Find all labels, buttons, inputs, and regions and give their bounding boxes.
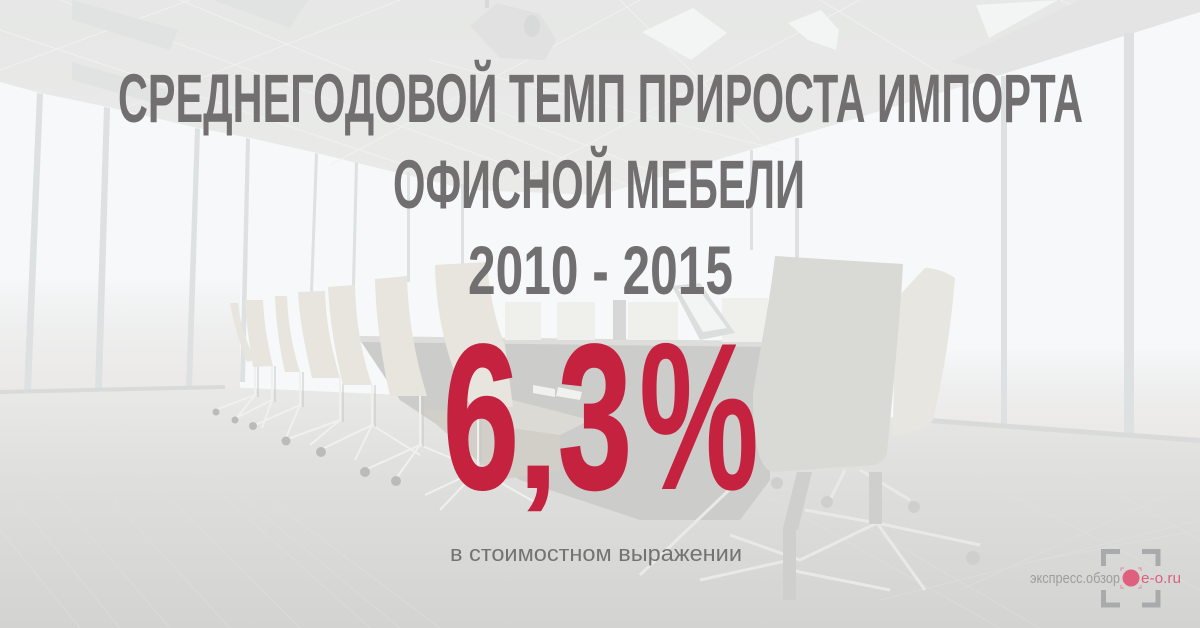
- title: [118, 59, 1083, 309]
- projector: [470, 0, 556, 60]
- logo: [1030, 552, 1181, 605]
- subtitle: в стоимостном выражении: [450, 541, 742, 566]
- row of chair backs: [230, 262, 513, 407]
- title line 3: years: 2010 - 2015: [468, 232, 733, 309]
- main figure: 3: [558, 302, 632, 532]
- main figure: %: [639, 299, 759, 534]
- conference table: [360, 283, 770, 520]
- title line 2: ОФИСНОЙ МЕБЕЛИ: [393, 145, 805, 223]
- main figure: 6: [443, 302, 519, 532]
- logo red dot: [1122, 570, 1140, 586]
- logo grey text: экспресс.обзор: [1030, 570, 1120, 587]
- large front chair back: [753, 256, 903, 472]
- floor carpet streaks: [0, 420, 1200, 628]
- right side chair: [893, 268, 955, 435]
- logo frame corners: [1104, 552, 1158, 605]
- middle chair seat: [470, 400, 590, 435]
- logo domain text: e-o.ru: [1141, 570, 1181, 587]
- front chair legs: [640, 470, 980, 590]
- main figure: [443, 299, 759, 534]
- main figure: ,: [517, 352, 559, 520]
- chair legs: row of chairs: [215, 362, 540, 510]
